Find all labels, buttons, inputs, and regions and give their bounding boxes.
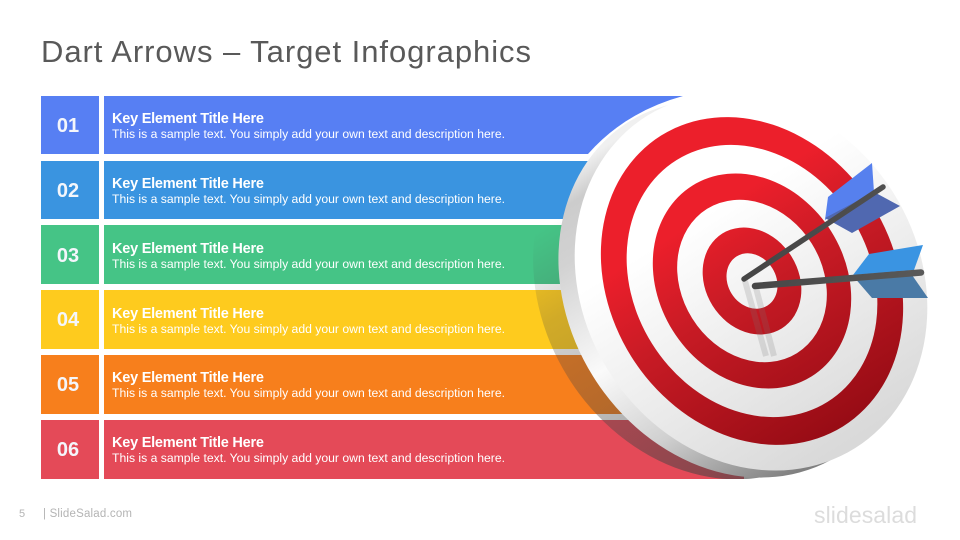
row 02: This is a sample text. You simply add your own text and description here. [112,192,505,206]
row 03: This is a sample text. You simply add your own text and description here. [112,257,505,271]
board face [505,27,960,537]
row 03: 03 [57,245,79,267]
row 05 [41,355,744,414]
board shadow [534,245,760,479]
row 05: 05 [57,374,79,396]
row 05: Key Element Title Here [112,370,264,386]
row 05: This is a sample text. You simply add your own text and description here. [112,386,505,400]
row 06: Key Element Title Here [112,435,264,451]
row 01: Key Element Title Here [112,111,264,127]
arrow: upper blue dart [744,163,900,279]
row 02 [41,161,704,219]
panel: list of six elements [41,96,744,479]
row 06: This is a sample text. You simply add your own text and description here. [112,451,505,465]
arrow shadows [745,281,774,356]
icon: dartboard target with two arrows [534,106,928,479]
board side edge [489,34,960,540]
row 03 [41,225,704,284]
row 01: This is a sample text. You simply add your own text and description here. [112,127,505,141]
row 04 [41,290,704,349]
row 04: 04 [57,309,80,331]
title: Dart Arrows – Target Infographics [41,34,531,69]
row 06: 06 [57,439,79,461]
row 02: Key Element Title Here [112,176,264,192]
target rings [540,60,960,502]
row 01: 01 [57,115,79,137]
row 06 [41,420,744,479]
row 04: Key Element Title Here [112,306,264,322]
row 04: This is a sample text. You simply add your own text and description here. [112,322,505,336]
arrow: lower light-blue dart [755,245,928,298]
footer: brand logo: slidesalad [814,502,917,528]
footer: site name: | SlideSalad.com [43,508,132,520]
footer: page number: 5 [19,508,25,520]
row 01 [41,96,683,154]
row 02: 02 [57,180,79,202]
row 03: Key Element Title Here [112,241,264,257]
